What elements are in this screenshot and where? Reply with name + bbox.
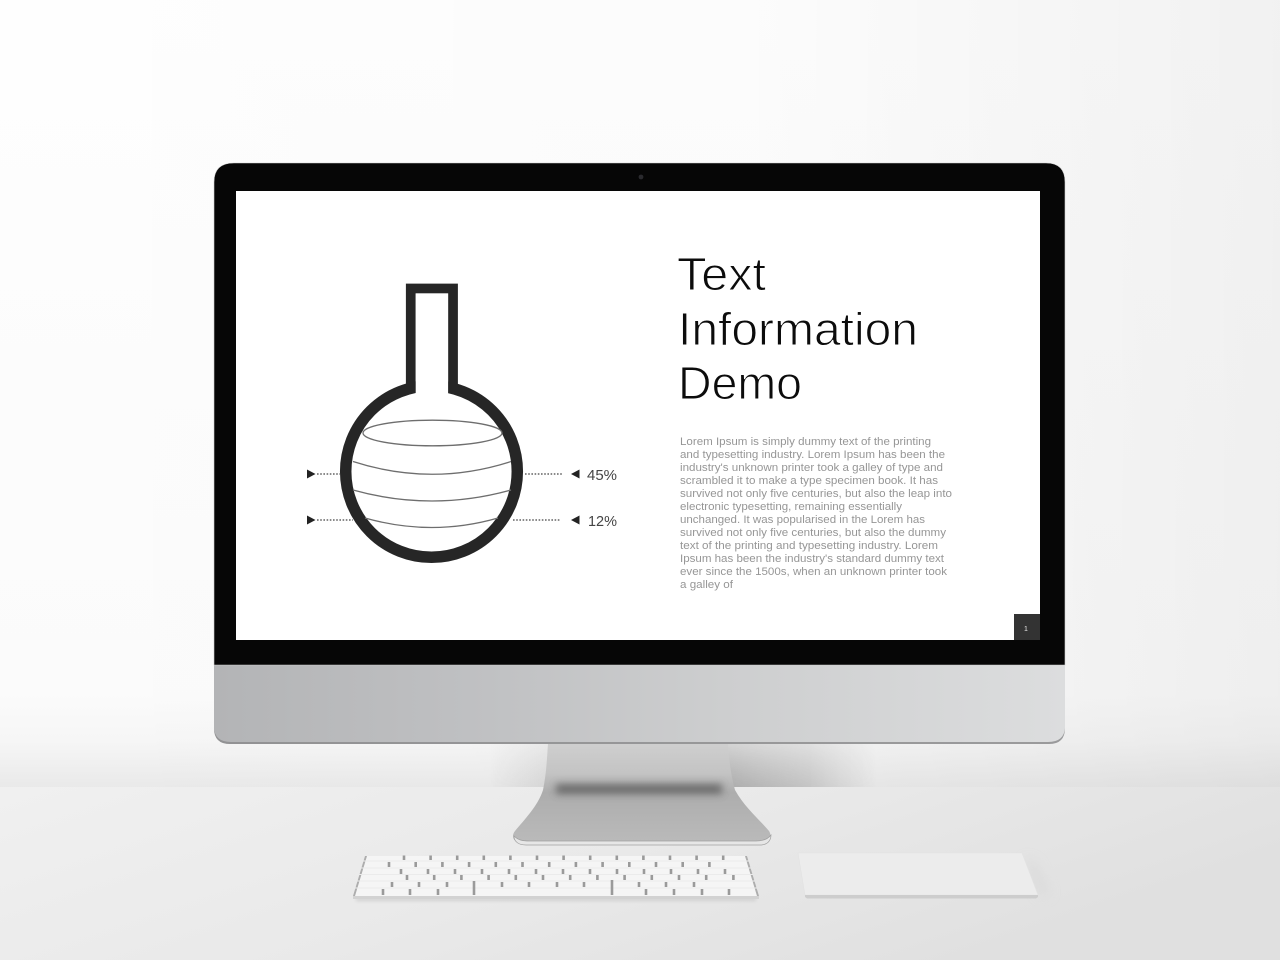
liquid level curve 2 <box>353 490 511 501</box>
keyboard <box>353 856 759 901</box>
liquid level ellipse <box>363 420 502 446</box>
screen <box>236 191 1040 640</box>
webcam <box>639 175 643 179</box>
title: Information <box>678 303 918 355</box>
body text: ever since the 1500s, when an unknown printer took <box>680 566 947 578</box>
body text: a galley of <box>680 579 734 591</box>
flask neck <box>411 288 453 392</box>
keyboard front edge <box>353 896 759 899</box>
title: Text <box>677 248 766 300</box>
body text: survived not only five centuries, but also the leap into <box>680 488 952 500</box>
body text: Lorem Ipsum is simply dummy text of the printing <box>680 436 931 448</box>
key row lines <box>355 861 757 888</box>
desk surface <box>0 787 1280 960</box>
45% callout <box>525 467 617 484</box>
liquid level curve 1 <box>353 462 511 474</box>
45% callout: 45% <box>587 467 617 484</box>
12% callout <box>513 513 617 530</box>
body text: and typesetting industry. Lorem Ipsum has been the <box>680 449 945 461</box>
trackpad edge <box>805 895 1038 898</box>
left marker top <box>307 470 340 478</box>
trackpad shadow <box>1024 858 1050 895</box>
monitor <box>214 163 1065 744</box>
monitor stand <box>513 743 771 845</box>
12% callout: 12% <box>588 513 617 530</box>
title <box>677 248 918 409</box>
keyboard side edges <box>353 856 759 896</box>
body text <box>680 436 952 591</box>
keyboard body <box>353 856 759 899</box>
body text: survived not only five centuries, but also the dummy <box>680 527 946 539</box>
page number box <box>1014 614 1040 640</box>
wall shadow right of stand <box>728 744 860 787</box>
body text: text of the printing and typesetting industry. Lorem <box>680 540 938 552</box>
page number box: 1 <box>1024 626 1028 633</box>
body text: unchanged. It was popularised in the Lorem has <box>680 514 925 526</box>
left marker bottom <box>307 516 353 524</box>
body text: electronic typesetting, remaining essentially <box>680 501 902 513</box>
liquid level curve 3 <box>365 518 498 528</box>
black bezel <box>214 163 1065 665</box>
flask chart <box>307 288 617 557</box>
title: Demo <box>678 357 802 409</box>
flask neck opening <box>416 293 448 395</box>
stand shadow band <box>556 784 722 794</box>
flask bowl <box>346 386 517 557</box>
trackpad top <box>798 853 1038 895</box>
body text: Ipsum has been the industry's standard dummy text <box>680 553 945 565</box>
stand body <box>513 743 771 842</box>
body text: industry's unknown printer took a galley of type and <box>680 462 943 474</box>
silver chin <box>214 660 1065 744</box>
body text: scrambled it to make a type specimen book. It has <box>680 475 938 487</box>
keyboard shadow <box>356 898 756 901</box>
key gaps <box>383 856 733 895</box>
stand base edge <box>514 835 771 845</box>
wall shadow left of stand <box>512 744 548 787</box>
trackpad <box>798 853 1050 898</box>
